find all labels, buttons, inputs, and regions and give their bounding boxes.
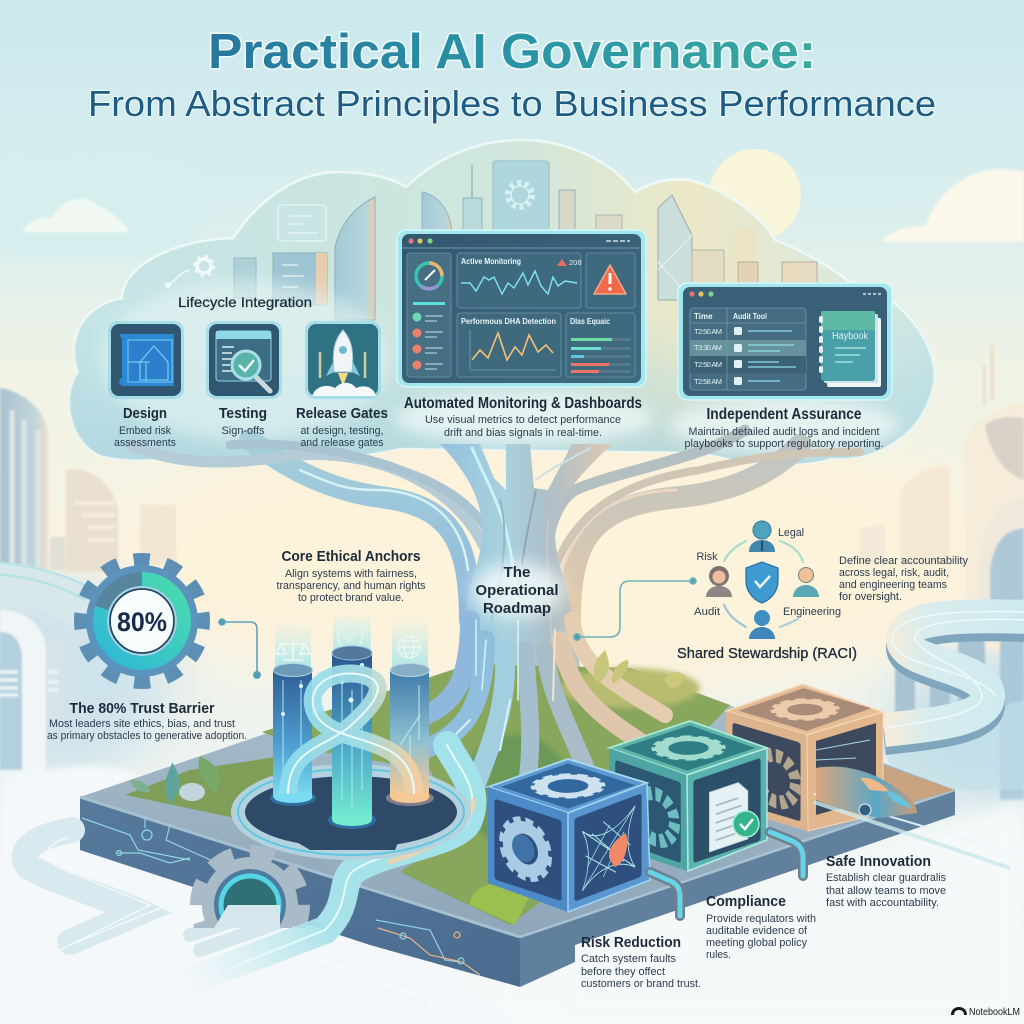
tree roots over platform: [415, 620, 665, 800]
active monitoring chart: Active Monitoring: [461, 257, 521, 266]
active monitoring chart: 208: [569, 258, 582, 267]
left buildings: [0, 388, 176, 780]
performance drift chart: [457, 313, 561, 377]
core ethical anchors description: Align systems with fairness,: [285, 568, 417, 580]
role labels: Risk: [696, 551, 718, 563]
audit table: [690, 308, 806, 390]
shared stewardship description: [839, 555, 968, 603]
shared stewardship description: and engineering teams: [839, 579, 947, 591]
pillar right: [386, 664, 434, 806]
ground: [0, 766, 520, 1024]
release gates label: Release Gates: [296, 405, 388, 422]
compliance text: Provide requlators with: [706, 913, 816, 925]
ground road and gear gate: [25, 745, 474, 1008]
icon: globe: [398, 636, 420, 658]
performance drift chart: Performous DHA Detection: [461, 317, 556, 326]
top gear: [622, 725, 755, 771]
core ethical anchors description: transparency, and human rights: [276, 580, 426, 592]
trust barrier description: [47, 718, 247, 742]
left roads: [0, 562, 120, 612]
shield: [746, 562, 778, 603]
title: [88, 25, 936, 124]
cube: compliance: [609, 721, 767, 871]
risk reduction text: customers or brand trust.: [581, 978, 701, 990]
cloud left: [22, 199, 130, 232]
trust barrier heading: The 80% Trust Barrier: [70, 701, 215, 717]
person: audit: [749, 610, 775, 639]
audit table: T2:50 AM: [694, 327, 722, 336]
shared stewardship description: across legal, risk, audit,: [839, 567, 949, 579]
ring arcs: [724, 541, 803, 627]
operational roadmap label: Roadmap: [483, 600, 551, 617]
compliance text: meeting global policy: [706, 937, 807, 949]
circuit traces: [82, 815, 480, 975]
connector tabs: [650, 832, 803, 916]
faded ground circuit road: [25, 830, 300, 950]
person: legal: [749, 521, 775, 552]
lifecycle integration section: [108, 294, 388, 449]
skyline in cloud: [234, 161, 817, 320]
shared stewardship heading: Shared Stewardship (RACI): [677, 646, 857, 662]
design description: Embed risk: [119, 425, 171, 437]
compliance text: [706, 893, 816, 961]
pillar middle: [328, 646, 376, 829]
dashboard heading: Automated Monitoring & Dashboards: [404, 395, 642, 412]
platform slab: [80, 664, 955, 987]
person: risk: [706, 566, 732, 597]
role labels: Audit: [694, 606, 720, 618]
plants on platform: [125, 650, 686, 818]
panel: monitoring dashboard: [397, 230, 646, 387]
dashboard description: [425, 414, 621, 439]
bias equity chart: Dlas Equaic: [570, 317, 610, 326]
trust barrier description: Most leaders site ethics, bias, and trust: [49, 718, 235, 730]
gear gate: [198, 853, 302, 957]
role labels: Engineering: [783, 606, 841, 618]
icon: scales: [276, 640, 310, 660]
safe innovation text: that allow teams to move: [826, 885, 946, 897]
top gear: [501, 763, 635, 809]
design label: Design: [123, 405, 167, 422]
independent assurance heading: Independent Assurance: [706, 406, 862, 423]
tree canopy cloud: [69, 140, 934, 464]
moss back area: [262, 664, 730, 925]
pillar light columns and icons: [275, 610, 428, 670]
safe innovation text: Safe Innovation: [826, 853, 931, 870]
sun behind cloud: [709, 149, 801, 241]
audit table: Audit Tool: [733, 312, 767, 321]
trust barrier description: as primary obstacles to generative adoption.: [47, 730, 247, 742]
release gates description: [300, 425, 384, 449]
person: engineering: [793, 568, 819, 597]
lifecycle heading: Lifecycle Integration: [178, 294, 312, 310]
active monitoring chart: [457, 253, 582, 308]
pillars pedestal: [231, 764, 471, 860]
safe innovation text: fast with accountability.: [826, 897, 939, 909]
light halos behind cloud text: [100, 280, 390, 440]
compliance text: rules.: [706, 949, 731, 961]
compliance text: Compliance: [706, 893, 786, 910]
risk reduction text: Risk Reduction: [581, 934, 681, 951]
left face gear: [494, 799, 562, 901]
shared stewardship description: for oversight.: [839, 591, 902, 603]
dashboard description: Use visual metrics to detect performance: [425, 414, 621, 426]
connector: gear to pillars: [219, 619, 260, 678]
tree trunk and branches: [130, 430, 860, 700]
top gear: [739, 688, 871, 731]
pillar left: [270, 664, 316, 806]
testing description: Sign-offs: [222, 425, 265, 437]
cube: safe innovation: [726, 684, 883, 831]
cube: risk reduction: [488, 759, 650, 912]
glowing road from trunk: [180, 745, 474, 1008]
audit table: T2:50 AM: [694, 360, 722, 369]
safe innovation text: [826, 853, 946, 909]
small gear icon in cloud: [165, 258, 212, 288]
alert panel: [586, 253, 635, 308]
gauge panel: [407, 253, 451, 377]
connector: trunk to RACI: [574, 578, 696, 640]
risk reduction text: [581, 934, 701, 990]
independent assurance description: [684, 426, 884, 450]
playbook notebook: [821, 311, 881, 387]
role labels: [694, 527, 841, 618]
icon: design blueprint: [108, 321, 184, 399]
audit table: T2:58 AM: [694, 377, 722, 386]
title: From Abstract Principles to Business Performance: [88, 83, 936, 124]
title: Practical AI Governance:: [208, 25, 816, 79]
role labels: Legal: [778, 527, 804, 539]
risk reduction text: before they offect: [581, 966, 665, 978]
core ethical anchors description: [276, 568, 426, 604]
independent assurance description: playbooks to support regulatory reporting.: [684, 438, 884, 450]
dashboard description: drift and bias signals in real-time.: [444, 427, 602, 439]
core ethical anchors heading: Core Ethical Anchors: [282, 548, 420, 565]
audit table: T3:30 AM: [694, 343, 722, 352]
left face gear: [615, 760, 681, 863]
right buildings: [860, 345, 1024, 800]
safety net icon: [574, 793, 642, 902]
tunnel: [816, 723, 876, 815]
shared stewardship RACI diagram: [694, 521, 841, 639]
playbook notebook: Haybook: [832, 331, 869, 342]
shared stewardship description: Define clear accountability: [839, 555, 968, 567]
left face gear: [732, 723, 801, 821]
panel: audit tool window: [678, 283, 892, 400]
train and rail: [814, 767, 1020, 868]
compliance text: auditable evidence of: [706, 925, 808, 937]
audit table: Time: [694, 312, 713, 321]
icon: rocket release: [305, 321, 381, 399]
icon: testing magnifier: [206, 321, 282, 399]
trust barrier gear: [83, 562, 201, 680]
right road: [884, 611, 1024, 738]
icon: shield: [338, 622, 362, 652]
design description: assessments: [114, 437, 176, 449]
operational roadmap label: The: [504, 564, 530, 581]
bias equity chart: [566, 313, 635, 377]
operational roadmap label: Operational: [476, 582, 558, 599]
release gates description: and release gates: [300, 437, 384, 449]
NotebookLM badge: [951, 1006, 1020, 1018]
operational roadmap label: [471, 562, 563, 618]
testing label: Testing: [219, 405, 267, 422]
core ethical anchors description: to protect brand value.: [298, 592, 404, 604]
ethical ribbon knot: [288, 673, 414, 794]
document check icon: [693, 758, 761, 863]
cloud right: [882, 169, 1024, 242]
stat: 80%: 80%: [117, 607, 167, 637]
risk reduction text: Catch system faults: [581, 953, 676, 965]
release gates description: at design, testing,: [300, 425, 384, 437]
safe innovation text: Establish clear guardralis: [826, 872, 946, 884]
design description: [114, 425, 176, 449]
independent assurance description: Maintain detailed audit logs and incident: [688, 426, 880, 438]
